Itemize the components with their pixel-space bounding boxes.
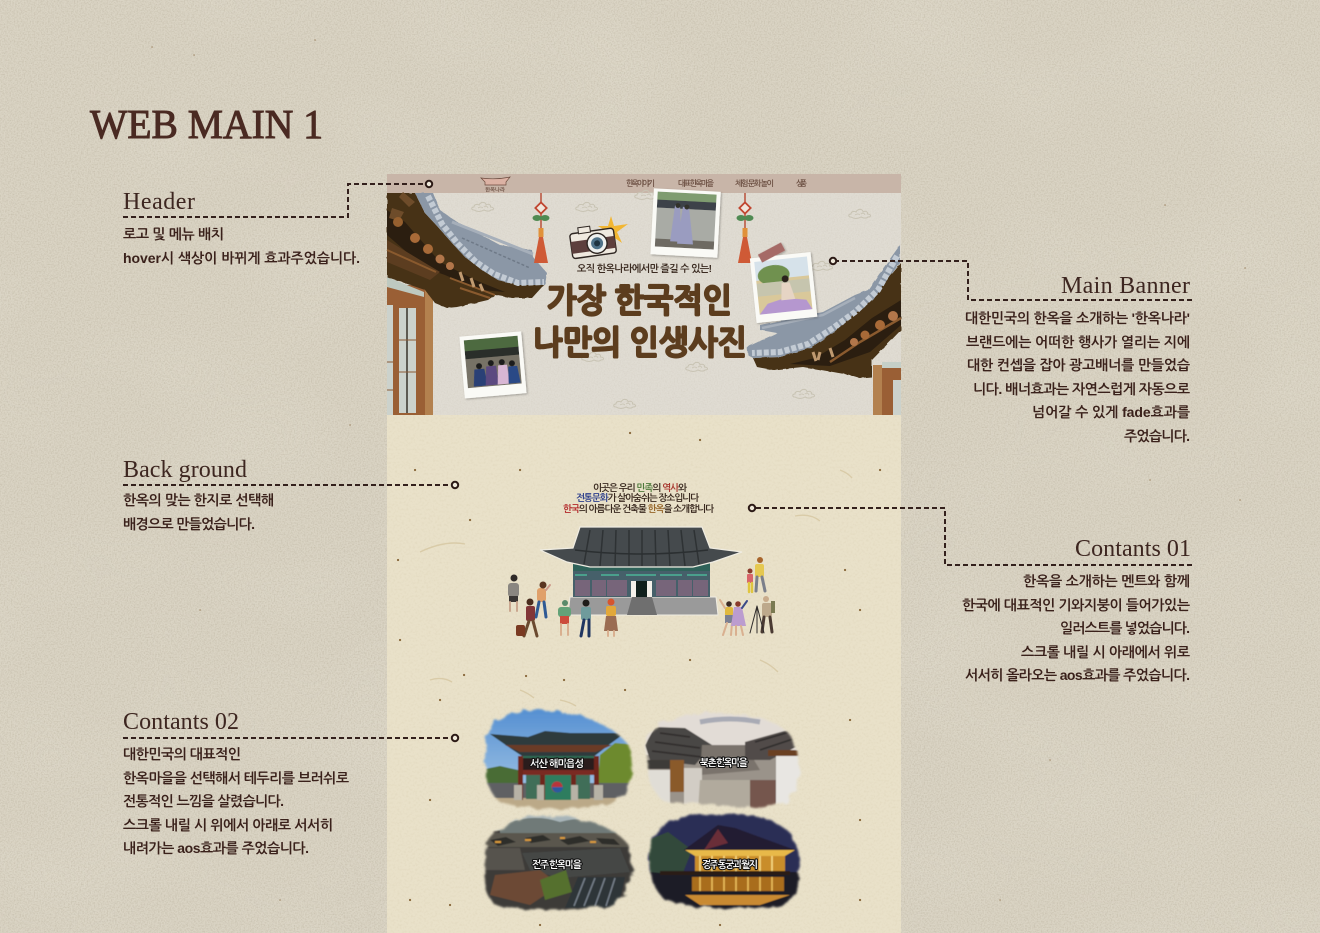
icon: left norigae tassel: [532, 193, 550, 263]
annotation: Main Banner: 니다. 배너효과는 자연스럽게 자동으로: [973, 381, 1190, 397]
left hanok eave: [387, 192, 547, 415]
annotation: Contants 02: Contants 02: [123, 709, 239, 735]
annotation: Contants 01: 한국에 대표적인 기와지붕이 들어가있는: [962, 597, 1190, 613]
banner headline: 가장 한국적인: [547, 282, 732, 319]
annotation: Main Banner: 대한민국의 한옥을 소개하는 '한옥나라': [965, 310, 1190, 326]
annotation: Contants 02: 전통적인 느낌을 살렸습니다.: [123, 793, 284, 809]
banner headline: [533, 282, 747, 361]
annotation: Header: [123, 181, 432, 266]
decoration: clouds: [472, 190, 871, 408]
website: header bar: 대표 한옥마을: [678, 179, 714, 188]
annotation: Back ground: Back ground: [123, 457, 247, 483]
annotation: Contants 01: [749, 505, 1192, 683]
content 01: intro copy: 한국의 아름다운 건축물 한옥을 소개합니다: [563, 504, 714, 515]
content 02: village card 경주: [646, 812, 802, 912]
title: WEB MAIN 1: [90, 101, 323, 147]
content 02: village card 북촌: 북촌 한옥마을: [700, 757, 749, 769]
content 02: village card 전주: [482, 814, 636, 912]
content 01: intro copy: 전통문화가 살아숨쉬는 장소입니다: [576, 492, 699, 504]
content 02: village card 해미읍성: [482, 708, 634, 812]
icon: hanok logo: 한옥나라: [485, 186, 506, 194]
annotation: Contants 02: 대한민국의 대표적인: [123, 746, 241, 762]
annotation: Main Banner: Main Banner: [1061, 273, 1190, 299]
website: header bar: 한옥이야기: [626, 179, 655, 188]
website: header bar: [387, 174, 901, 194]
annotation: Main Banner: [830, 258, 1192, 444]
website: main banner: [387, 188, 901, 415]
banner eyebrow: 오직 한옥나라에서만 즐길 수 있는!: [577, 263, 712, 275]
illustration: traditional hanok hall: [540, 527, 742, 615]
icon: right norigae tassel: [736, 193, 754, 263]
annotation: Main Banner: 대한 컨셉을 잡아 광고배너를 만들었습: [967, 357, 1190, 373]
annotation: Main Banner: 주었습니다.: [1124, 428, 1190, 444]
annotation: Contants 01: 스크롤 내릴 시 아래에서 위로: [1021, 644, 1190, 660]
annotation: Header: 로고 및 메뉴 배치: [123, 226, 224, 242]
annotation: Main Banner: 브랜드에는 어떠한 행사가 열리는 지에: [966, 334, 1190, 350]
content 02: village card 전주: 전주 한옥마을: [532, 859, 583, 871]
right hanok eave: [747, 245, 901, 415]
website: page background: [387, 174, 901, 933]
photo: hanbok couple by the wall: [650, 188, 721, 258]
annotation: Back ground: 배경으로 만들었습니다.: [123, 516, 255, 532]
content 02: village card 경주: 경주 동궁과 월지: [702, 859, 758, 871]
banner headline: 나만의 인생사진: [533, 324, 747, 361]
annotation: Contants 02: 내려가는 aos효과를 주었습니다.: [123, 840, 309, 856]
annotation: Header: hover시 색상이 바뀌게 효과주었습니다.: [123, 250, 360, 266]
annotation: Header: Header: [123, 189, 195, 215]
annotation: Back ground: 한옥의 맞는 한지로 선택해: [123, 492, 274, 508]
annotation: Contants 01: 일러스트를 넣었습니다.: [1060, 620, 1190, 636]
annotation: Main Banner: 넘어갈 수 있게 fade효과를: [1032, 404, 1190, 420]
photo: four women in hanbok: [459, 331, 527, 398]
content 02: village card 해미읍성: 서산 해미읍성: [530, 758, 584, 770]
annotation: Contants 01: Contants 01: [1075, 536, 1191, 562]
illustration: tourists right: [720, 557, 775, 635]
annotation: Contants 02: [123, 709, 458, 856]
photo: woman in lilac hanbok: [749, 240, 817, 323]
content 02: village card 북촌: [644, 711, 801, 810]
annotation: Contants 01: 한옥을 소개하는 멘트와 함께: [1023, 573, 1190, 589]
content 01: intro copy: [563, 482, 714, 515]
content 01: intro copy: 이곳은 우리 민족의 역사와: [593, 482, 687, 494]
annotation: Contants 01: 서서히 올라오는 aos효과를 주었습니다.: [965, 667, 1190, 683]
annotation: Contants 02: 스크롤 내릴 시 위에서 아래로 서서히: [123, 817, 333, 833]
annotation: Contants 02: 한옥마을을 선택해서 테두리를 브러쉬로: [123, 770, 349, 786]
icon: hanok logo: [481, 177, 510, 194]
illustration: tourists left: [508, 574, 618, 636]
icon: camera with flash: [569, 216, 628, 259]
website: header bar: 체험 문화 놀이: [735, 179, 774, 188]
website: header bar: 상품: [796, 179, 807, 188]
annotation: Back ground: [123, 457, 458, 532]
